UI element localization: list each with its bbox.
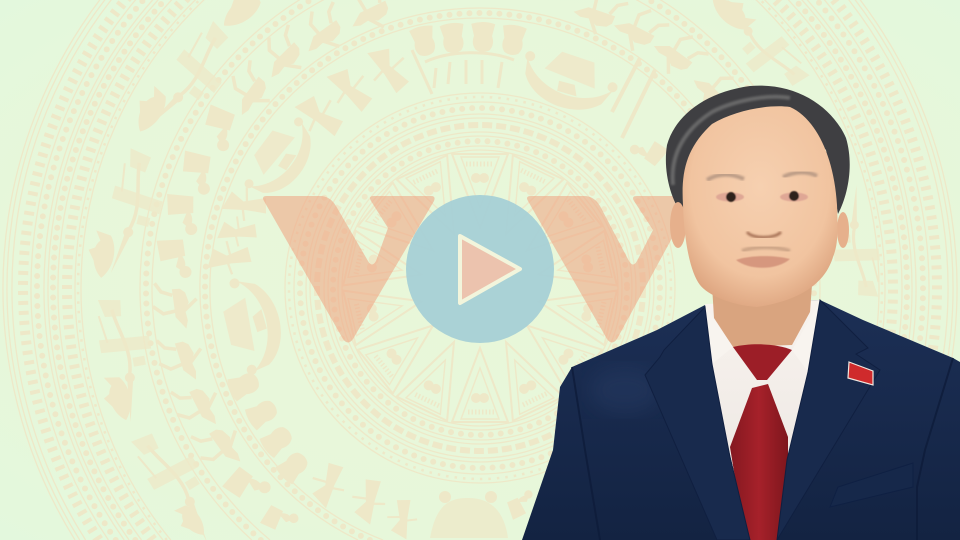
VOV logo [263, 195, 695, 343]
head [666, 86, 850, 307]
mouth [736, 256, 790, 268]
tie body [730, 384, 788, 540]
play triangle [460, 236, 520, 303]
middle drum rings [140, 0, 820, 540]
neck [712, 285, 812, 347]
right eye [780, 191, 808, 202]
deer ring [151, 0, 788, 540]
right lapel [777, 300, 880, 540]
left eyebrow [707, 175, 744, 180]
hair [666, 86, 850, 214]
letter V left [263, 196, 435, 342]
suit jacket [522, 300, 960, 540]
flag pin [848, 362, 873, 385]
letter V right [527, 196, 695, 342]
necktie [730, 344, 792, 540]
shirt [705, 300, 820, 540]
inner figure ring [207, 22, 671, 540]
nose [747, 232, 781, 237]
breast pocket [830, 463, 913, 507]
central star band [285, 93, 675, 483]
face [683, 106, 838, 307]
shirt collars [705, 301, 820, 372]
suit sleeve folds [572, 358, 953, 540]
play circle [406, 195, 554, 343]
right ear [837, 212, 849, 248]
tie knot [733, 344, 792, 380]
shoulder light [589, 366, 661, 414]
left ear [670, 202, 686, 248]
left eye [716, 192, 744, 202]
central star rays [343, 154, 617, 422]
portrait [522, 86, 960, 540]
left lapel [645, 307, 750, 540]
play button [406, 195, 554, 343]
grey hair highlight [673, 97, 790, 185]
right eyebrow [783, 172, 817, 177]
moustache shadow [742, 247, 790, 251]
